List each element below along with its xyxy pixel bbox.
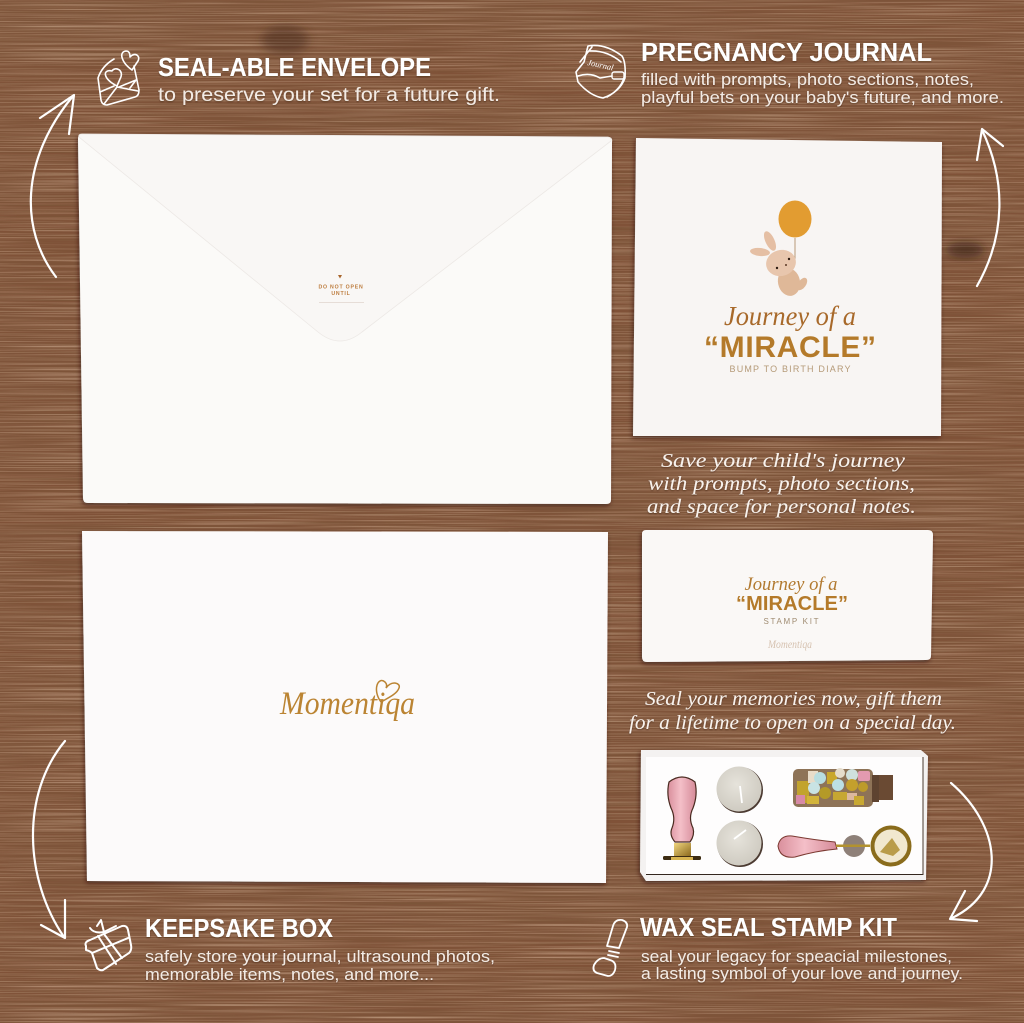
icon: wax stamp bbox=[663, 777, 701, 860]
arrow: top left bbox=[31, 95, 74, 277]
caption: journey: Save your child's journey bbox=[661, 450, 905, 472]
envelope label bbox=[318, 275, 364, 302]
arrow: bottom right bbox=[950, 783, 992, 921]
heading: wax seal stamp kit: a lasting symbol of your love and journey. bbox=[641, 964, 963, 983]
icon: journal bbox=[576, 45, 625, 98]
heading: keepsake box: safely store your journal, ultrasound photos, bbox=[145, 947, 495, 966]
heading: wax seal stamp kit bbox=[640, 912, 963, 983]
heading: seal-able envelope: SEAL-ABLE ENVELOPE bbox=[158, 52, 431, 82]
icon: bunny with balloon bbox=[750, 200, 812, 298]
envelope flap bbox=[79, 134, 611, 341]
icon: envelope with hearts bbox=[98, 51, 139, 105]
journal title: “MIRACLE” bbox=[704, 331, 876, 364]
heading: keepsake box: KEEPSAKE BOX bbox=[145, 913, 334, 943]
heading: wax seal stamp kit: seal your legacy for speacial milestones, bbox=[641, 947, 952, 966]
caption: journey bbox=[647, 450, 916, 518]
caption: seal: for a lifetime to open on a special day. bbox=[629, 712, 956, 734]
arrow: bottom left bbox=[33, 741, 65, 938]
envelope label: UNTIL bbox=[331, 291, 351, 297]
stamp kit title: Momentiqa bbox=[767, 637, 812, 651]
heading: pregnancy journal: PREGNANCY JOURNAL bbox=[641, 37, 932, 67]
heading: pregnancy journal: playful bets on your baby's future, and more. bbox=[641, 88, 1004, 107]
stamp kit title bbox=[736, 574, 848, 651]
caption: journey: with prompts, photo sections, bbox=[648, 473, 915, 495]
stamp kit title: “MIRACLE” bbox=[736, 593, 848, 615]
panel: journal bbox=[633, 138, 942, 436]
heading: wax seal stamp kit: WAX SEAL STAMP KIT bbox=[640, 912, 897, 942]
caption: seal: Seal your memories now, gift them bbox=[645, 688, 942, 710]
icon: tea candles bbox=[716, 766, 763, 867]
box logo: Momentiqa bbox=[279, 686, 415, 722]
stamp kit title: STAMP KIT bbox=[764, 617, 819, 626]
journal title bbox=[704, 301, 876, 374]
caption: journey: and space for personal notes. bbox=[647, 496, 916, 518]
icon: gift box bbox=[86, 920, 131, 970]
icon: jar of wax beads bbox=[793, 768, 893, 807]
arrow: top right bbox=[977, 129, 1003, 286]
icon: melting spoon bbox=[778, 828, 910, 864]
heading: seal-able envelope bbox=[158, 52, 500, 106]
icon: stamp bbox=[593, 920, 627, 976]
heading: pregnancy journal bbox=[641, 37, 1004, 107]
journal title: BUMP TO BIRTH DIARY bbox=[730, 364, 850, 374]
caption: seal bbox=[629, 688, 956, 734]
heading: keepsake box: memorable items, notes, and more... bbox=[145, 965, 434, 984]
icon: journal: Journal bbox=[587, 57, 615, 73]
panel: keepsake box bbox=[82, 531, 608, 883]
panel: stamp kit box bbox=[642, 530, 933, 662]
heading: seal-able envelope: to preserve your set for a future gift. bbox=[158, 85, 500, 106]
envelope label: DO NOT OPEN bbox=[318, 284, 364, 290]
panel: envelope bbox=[78, 134, 612, 504]
heading: keepsake box bbox=[145, 913, 495, 984]
stamp kit title: Journey of a bbox=[744, 574, 838, 595]
journal title: Journey of a bbox=[724, 301, 856, 331]
panel: wax seal tray bbox=[640, 750, 928, 881]
heading: pregnancy journal: filled with prompts, photo sections, notes, bbox=[641, 70, 974, 89]
